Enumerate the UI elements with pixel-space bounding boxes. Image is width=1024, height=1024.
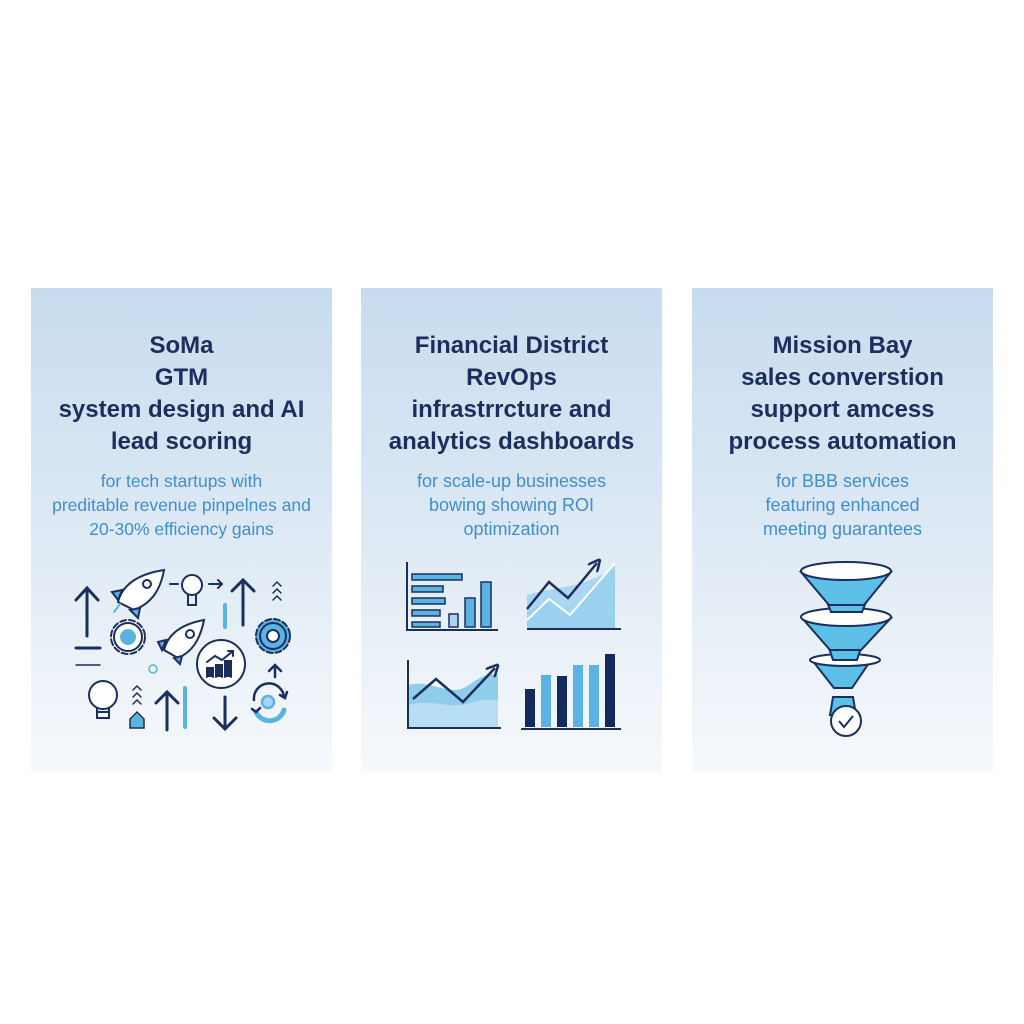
text: Mission Bay subtitle: meeting guarantees [763,519,922,539]
chart: horizontal and vertical bars [407,562,498,630]
heading: Mission Bay: process automation [728,428,957,455]
heading: SoMa: lead scoring [111,428,252,455]
panel: Mission Bay [692,288,993,772]
heading: Financial District: analytics dashboards [389,428,634,455]
text: Mission Bay subtitle: for BBB services [776,471,909,491]
heading: Mission Bay [728,332,957,455]
icon: up arrow top right [232,580,254,625]
text: Mission Bay subtitle: featuring enhanced [765,495,920,515]
panel: Financial District [361,288,662,772]
icon: rocket middle [158,620,204,664]
text: SoMa subtitle [52,471,311,539]
text: Financial District subtitle: bowing showing ROI [429,495,594,515]
icon: up arrow left [76,588,98,636]
icon: cycle [252,683,287,721]
heading: Mission Bay: sales converstion [741,364,944,391]
heading: SoMa [59,332,304,455]
icon: light bar [223,605,227,627]
text: SoMa subtitle: 20-30% efficiency gains [89,519,274,539]
heading: Financial District: Financial District [415,332,608,359]
heading: SoMa: SoMa [149,332,214,359]
icon: up arrow bottom [156,692,178,730]
icon: small up arrow right [269,665,281,677]
icon: chart circle [197,640,245,688]
icon: small dot [149,665,157,673]
heading: SoMa: system design and AI [59,396,304,423]
heading: Mission Bay: Mission Bay [772,332,913,359]
chart: area trend up [527,563,621,629]
icon: bulb top [170,575,222,605]
heading: Financial District [389,332,634,455]
chart: line over area [408,660,501,728]
icon: bulb bottom [89,681,117,718]
heading: SoMa: GTM [155,364,208,391]
icon cluster: growth icons [76,570,290,730]
icon: gear right [256,619,290,653]
text: SoMa subtitle: for tech startups with [101,471,262,491]
heading: Financial District: RevOps [466,364,557,391]
icon: chevrons [273,582,281,600]
icon: down arrow [214,697,236,729]
icon: lines [76,648,100,665]
icon: light bar bottom [183,688,187,727]
text: Mission Bay subtitle [763,471,922,539]
icon: funnel [801,562,891,736]
heading: Mission Bay: support amcess [750,396,935,423]
icon: gear left [111,620,145,654]
text: Financial District subtitle: for scale-up businesses [417,471,606,491]
icon: chevrons and house [130,686,144,728]
icon: rocket top [112,570,164,618]
text: SoMa subtitle: preditable revenue pinpelnes and [52,495,311,515]
text: Financial District subtitle [417,471,606,539]
text: Financial District subtitle: optimization [463,519,560,539]
chart: vertical bars [521,654,621,729]
panel: SoMa [31,288,332,772]
heading: Financial District: infrastrrcture and [411,396,612,423]
